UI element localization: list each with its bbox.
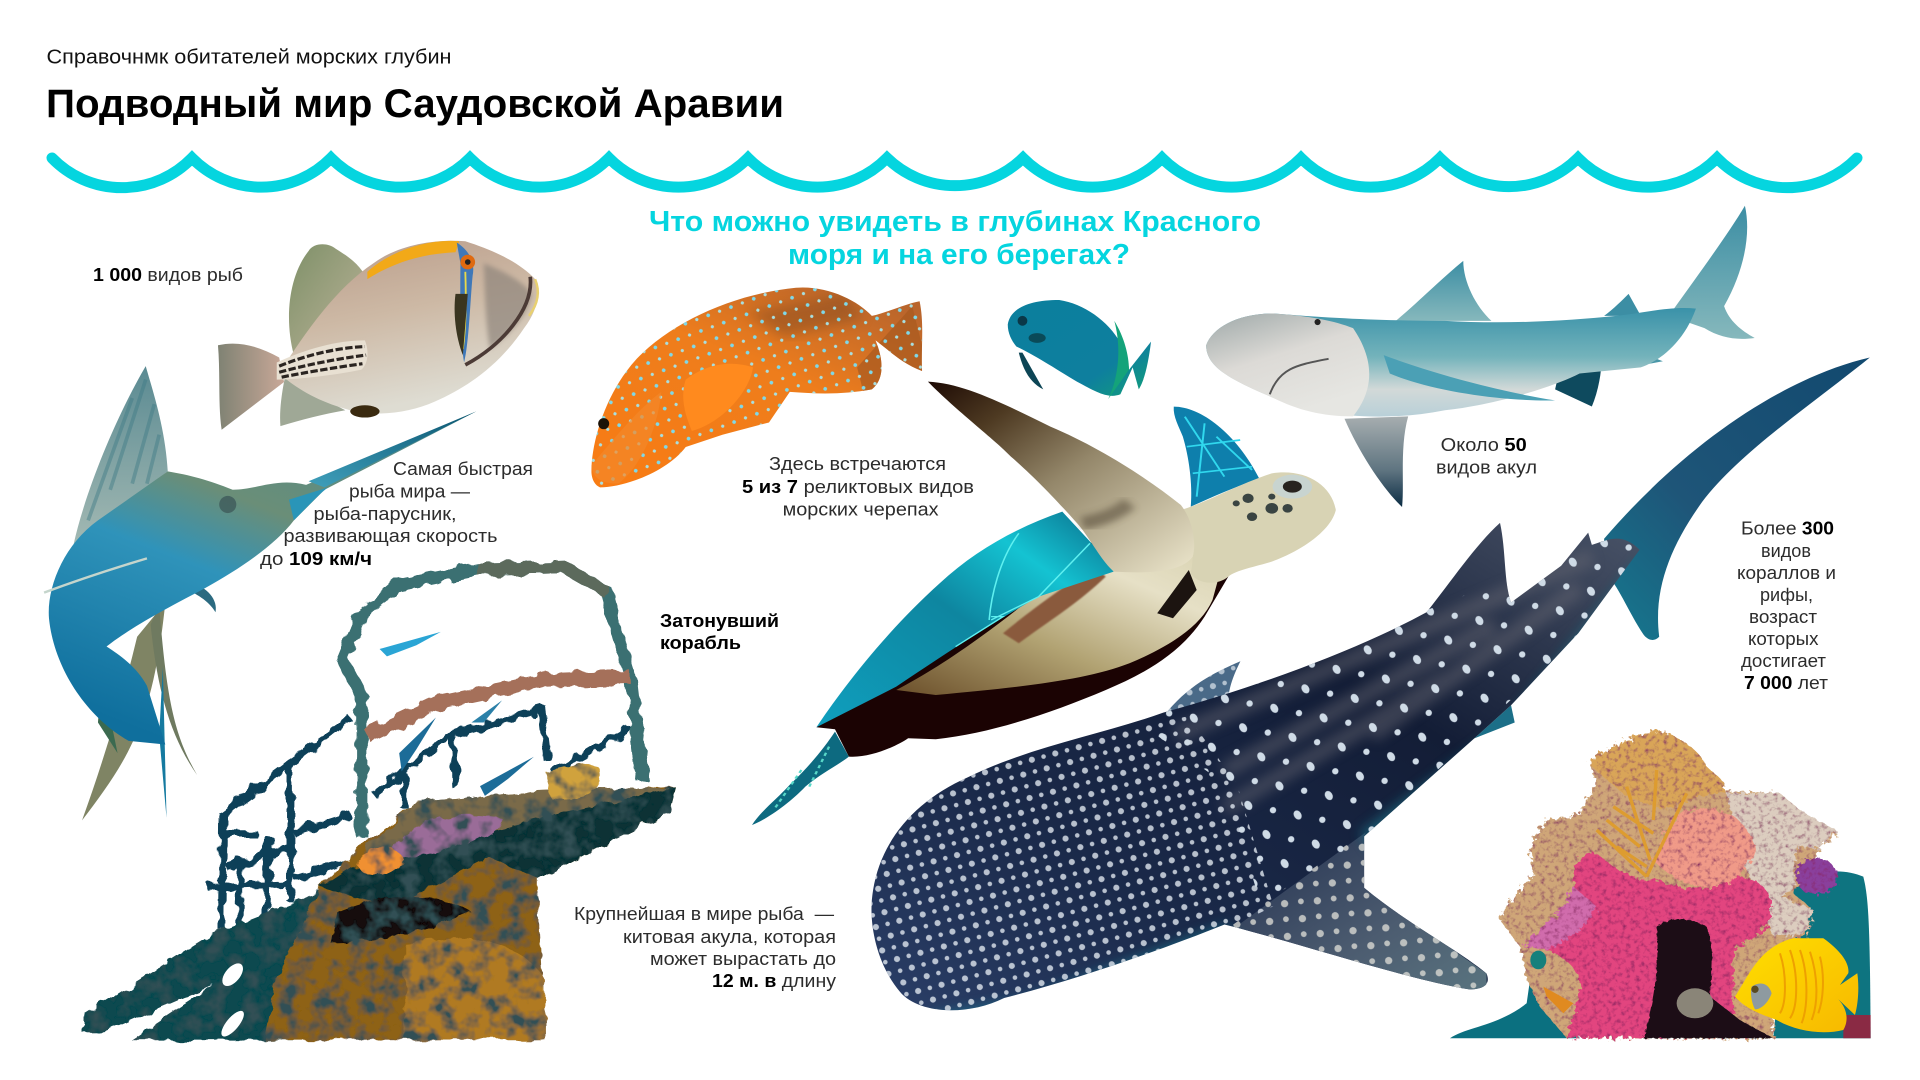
- section heading: моря и на его берегах?: [788, 239, 1130, 271]
- caption: corals: возраст: [1749, 607, 1817, 627]
- caption: corals: рифы,: [1760, 585, 1813, 605]
- caption: corals: видов: [1761, 541, 1811, 561]
- arch: [343, 567, 643, 836]
- picture: coral reef: [1450, 730, 1871, 1038]
- caption: whale shark: может вырастать до: [650, 949, 836, 969]
- caption: whale shark: Крупнейшая в мире рыба —: [574, 904, 834, 924]
- caption: sharks: [1436, 435, 1537, 478]
- caption: sunken ship: [660, 611, 779, 653]
- caption: sailfish: развивающая скорость: [284, 526, 498, 546]
- caption: turtles: 5 из 7 реликтовых видов: [742, 477, 974, 497]
- picture: whale shark: [871, 358, 1870, 1010]
- picture: sunken ship: [82, 567, 676, 1040]
- section heading: Что можно увидеть в глубинах Красного: [649, 206, 1261, 238]
- caption: sunken ship: корабль: [660, 633, 741, 653]
- caption: corals: достигает: [1741, 651, 1826, 671]
- caption: sharks: Около 50: [1441, 435, 1527, 455]
- rails: [208, 709, 631, 931]
- caption: fish count: 1 000 видов рыб: [93, 265, 243, 285]
- title: Подводный мир Саудовской Аравии: [46, 82, 784, 126]
- caption: sharks: видов акул: [1436, 458, 1537, 478]
- caption: sailfish: рыба-парусник,: [314, 504, 456, 524]
- caption: corals: которых: [1748, 629, 1818, 649]
- caption: sailfish: рыба мира —: [349, 482, 470, 502]
- picture: reef shark: [1206, 206, 1755, 507]
- caption: corals: кораллов и: [1737, 563, 1836, 583]
- caption: turtles: морских черепах: [783, 500, 939, 520]
- wave divider: [52, 158, 1857, 188]
- subtitle: Справочнмк обитателей морских глубин: [46, 46, 452, 68]
- caption: sailfish: Самая быстрая: [393, 459, 533, 479]
- caption: sunken ship: Затонувший: [660, 611, 779, 631]
- caption: whale shark: китовая акула, которая: [623, 927, 836, 947]
- picture: coral grouper: [591, 288, 922, 488]
- picture: sailfish: [44, 366, 476, 820]
- caption: whale shark: 12 м. в длину: [712, 971, 836, 991]
- picture: blue batfish: [1008, 300, 1151, 399]
- caption: turtles: Здесь встречаются: [769, 454, 946, 474]
- beam: [367, 677, 631, 736]
- artwork: [44, 206, 1870, 1078]
- caption: corals: [1737, 518, 1836, 693]
- hull: [82, 764, 676, 1040]
- section heading: [649, 206, 1261, 271]
- caption: turtles: [742, 454, 974, 520]
- caption: sailfish: до 109 км/ч: [260, 549, 372, 569]
- caption: whale shark: [574, 904, 836, 991]
- caption: corals: 7 000 лет: [1744, 673, 1828, 693]
- caption: sailfish: [260, 459, 533, 569]
- caption: corals: Более 300: [1741, 518, 1834, 538]
- picture: picasso triggerfish: [218, 241, 538, 430]
- picture: sea turtle: [752, 382, 1336, 825]
